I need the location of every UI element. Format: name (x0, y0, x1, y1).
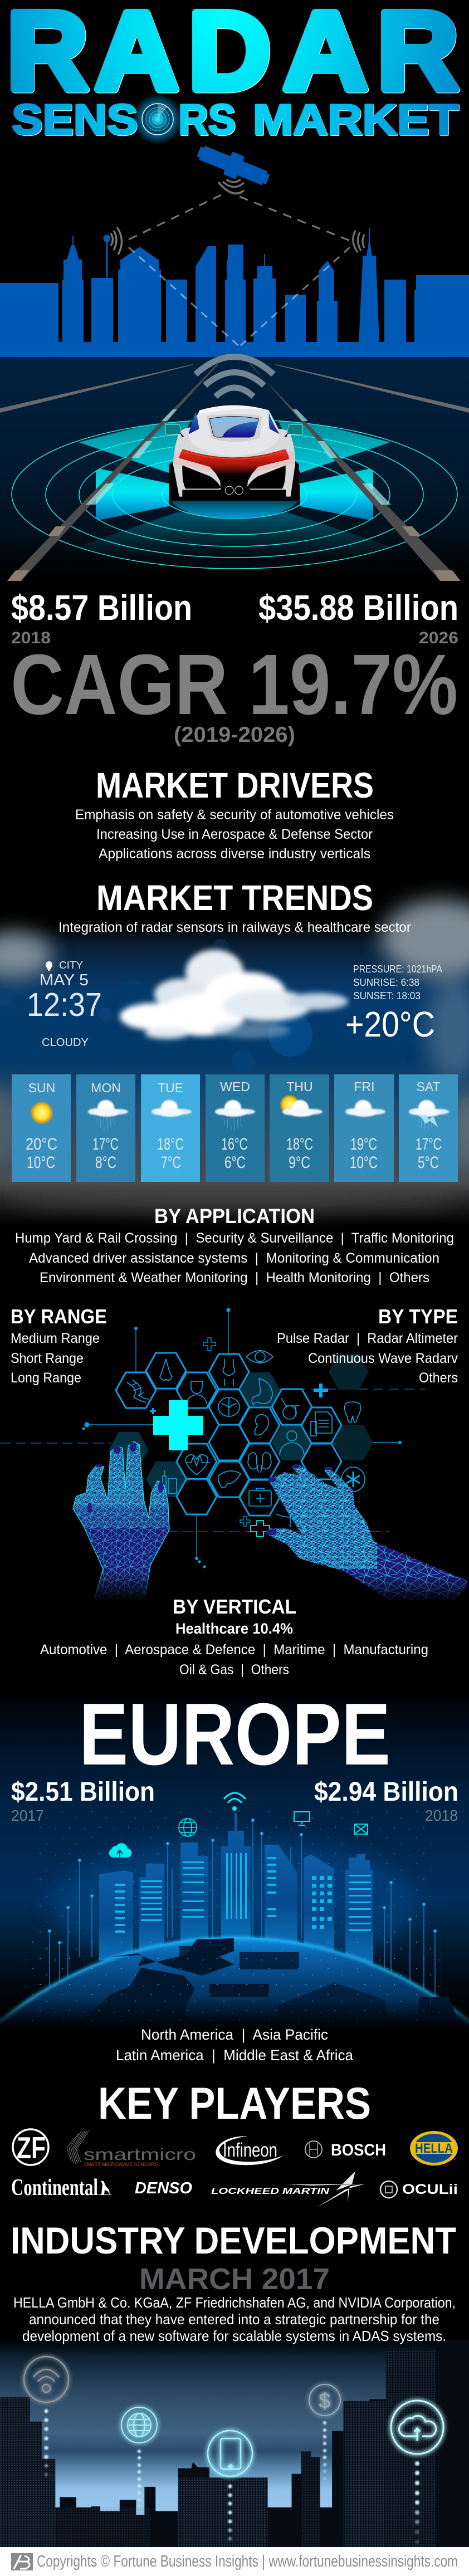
skyline (0, 2339, 469, 2547)
driver list (75, 807, 394, 862)
right wireframe hand (263, 1463, 469, 1603)
car (165, 405, 302, 501)
icon: kidneys (248, 1453, 271, 1469)
logo: Lockheed Martin: LOCKHEED MARTIN (211, 2187, 330, 2196)
medical icons (127, 1351, 365, 1527)
logo: Hella (410, 2131, 458, 2166)
dashed circuit lines (0, 1389, 425, 1532)
by range (11, 1305, 107, 1386)
lit windows (0, 2351, 435, 2547)
card: Tuesday: TUE (158, 1081, 183, 1095)
card: Wednesday (206, 1074, 265, 1182)
dim filled hexagons (109, 1354, 373, 1497)
icon: big cyan cross (153, 1400, 203, 1450)
regions list: Latin America | Middle East & Africa (116, 2047, 354, 2064)
logo: Bosch: BOSCH (331, 2141, 386, 2159)
card: Thursday: 9°C (289, 1153, 310, 1172)
icon: radar dial replacing the O (132, 94, 183, 145)
icon: vial and syringe (168, 1479, 177, 1493)
left wireframe hand (72, 1441, 171, 1600)
driver list: Emphasis on safety & security of automotive vehicles (75, 807, 394, 823)
market drivers (75, 765, 394, 862)
healthcare share: Healthcare 10.4% (175, 1620, 293, 1637)
pressure, sunrise, sunset (353, 964, 442, 1001)
heading: Europe: EUROPE (79, 1685, 390, 1783)
logo: Fortune Business Insights (11, 2553, 33, 2570)
card: Sunday: 20°C (26, 1135, 57, 1153)
drifting grey clouds (0, 900, 469, 1210)
vertical list (40, 1642, 428, 1678)
left hand fingernails (87, 1442, 164, 1513)
road scene (0, 356, 469, 581)
card: Thursday: THU (286, 1079, 313, 1094)
card: Thursday: 18°C (286, 1135, 313, 1153)
icon: doctor (287, 1431, 297, 1441)
CAGR period: (2019-2026) (174, 723, 295, 747)
right hand fade (329, 1576, 469, 1602)
card: Tuesday (141, 1074, 200, 1182)
title (7, 0, 458, 144)
icon: wifi circle (24, 2357, 69, 2402)
application list: Environment & Weather Monitoring | Health Monitoring | Others (40, 1270, 429, 1285)
continents (90, 1938, 457, 2016)
card: Friday (334, 1074, 394, 1182)
logo: Hella: HELLA (415, 2141, 453, 2156)
road outer lines (0, 364, 469, 413)
signal arcs and dashed links (111, 195, 364, 346)
location and time: MAY 5 (40, 971, 89, 989)
city towers (99, 1814, 373, 1963)
vertical list: Automotive | Aerospace & Defence | Maritime | Manufacturing (40, 1642, 428, 1658)
globe star field (22, 1938, 446, 2022)
regions list: North America | Asia Pacific (141, 2026, 328, 2043)
heading: by range: BY RANGE (11, 1305, 107, 1328)
icon: mail (354, 1824, 368, 1834)
range list: Long Range (11, 1370, 81, 1386)
application list: Hump Yard & Rail Crossing | Security & Surveillance | Traffic Monitoring (15, 1230, 454, 1246)
by vertical (40, 1595, 428, 1678)
icon: nose (160, 1359, 172, 1380)
card: Friday: 10°C (350, 1153, 378, 1172)
icon: wifi (224, 1793, 246, 1810)
icon: prescription (315, 1412, 332, 1433)
logo: smartmicro: smartmicro (84, 2145, 196, 2164)
icon: wheelchair (283, 1406, 296, 1419)
tower windows (115, 1853, 371, 1933)
data lines with dots (48, 1819, 437, 2005)
card: Sunday (12, 1074, 71, 1182)
right hand fingernails (266, 1464, 333, 1535)
icon: brain (218, 1397, 240, 1416)
left hand fade (91, 1571, 150, 1600)
outlined hexagons (116, 1353, 341, 1516)
heading: by type: BY TYPE (378, 1305, 458, 1328)
card: Saturday: 5°C (418, 1153, 439, 1172)
icon: first aid kit (249, 1490, 271, 1506)
icon: star of life (341, 1467, 365, 1492)
icon: heart (185, 1455, 208, 1475)
type list (277, 1331, 458, 1386)
stat: 2018 value: $8.57 Billion (11, 588, 192, 628)
logo: ZF: ZF (17, 2130, 46, 2165)
logo: Infineon (216, 2136, 284, 2165)
location and time: CLOUDY (42, 1037, 89, 1049)
type list: Pulse Radar | Radar Altimeter (277, 1331, 458, 1346)
card: Thursday (270, 1074, 329, 1182)
range list (11, 1331, 100, 1386)
heading: market trends: MARKET TRENDS (96, 878, 373, 918)
by application (15, 1205, 454, 1285)
connector lines with dots (82, 1308, 401, 1568)
year: 2018: 2018 (425, 1807, 458, 1824)
logo: smartmicro (67, 2131, 196, 2167)
icon: stomach (252, 1379, 272, 1405)
type list: Others (419, 1370, 458, 1386)
current temperature: +20°C (345, 1004, 435, 1044)
icon: DNA (127, 1380, 149, 1402)
stat: 2018 value: $2.94 Billion (314, 1777, 458, 1807)
type list: Continuous Wave Radarv (308, 1351, 458, 1366)
card: Monday: 8°C (95, 1153, 116, 1172)
skyline (0, 228, 469, 357)
icon: globe circle (121, 2407, 157, 2443)
icon: knee joint (223, 1359, 235, 1386)
market trends (58, 878, 411, 935)
driver list: Applications across diverse industry verticals (99, 846, 370, 862)
icon: nurse (187, 1381, 207, 1404)
stats: 2018 and 2026 market size (11, 588, 458, 647)
range list: Medium Range (11, 1331, 100, 1346)
icon: tooth (345, 1402, 360, 1423)
icon: caduceus (276, 1511, 305, 1527)
development paragraph: announced that they have entered into a strategic partnership for the (29, 2311, 439, 2328)
icon: map pin (46, 961, 52, 971)
application list (15, 1230, 454, 1285)
footer (0, 2547, 469, 2576)
driver list: Increasing Use in Aerospace & Defense Sector (96, 827, 373, 842)
forecast cards (12, 1074, 458, 1182)
hexagon medical graphic (0, 1308, 469, 1603)
icon: ear (255, 1415, 268, 1435)
globe (0, 1934, 469, 2027)
icon: eye (246, 1351, 273, 1363)
logo: Bosch (305, 2141, 386, 2159)
location and time: CITY (59, 960, 83, 971)
development paragraph (13, 2294, 456, 2344)
card: Friday: FRI (354, 1079, 375, 1094)
card: Wednesday: 6°C (224, 1153, 246, 1172)
icon: globe (179, 1819, 197, 1836)
logo: Lockheed Martin (211, 2171, 365, 2207)
pressure, sunrise, sunset: PRESSURE: 1021hPA (353, 964, 442, 975)
card: Monday (76, 1074, 135, 1182)
title line: SENSORS MARKET: MARKET (253, 96, 458, 144)
card: Wednesday: WED (220, 1079, 250, 1094)
location and time: 12:37 (27, 986, 102, 1023)
development paragraph: development of a new software for scalable systems in ADAS systems. (22, 2328, 446, 2344)
bottom city photo (0, 2339, 469, 2547)
trend text: Integration of radar sensors in railways & healthcare sector (58, 920, 411, 935)
big white cloud (120, 950, 348, 1039)
card: Tuesday: 18°C (157, 1135, 184, 1153)
card: Tuesday: 7°C (161, 1153, 181, 1172)
pressure, sunrise, sunset: SUNSET: 18:03 (353, 990, 421, 1001)
heading: by application: BY APPLICATION (154, 1205, 315, 1228)
icon: cloud circle (391, 2401, 443, 2454)
regions list (116, 2026, 354, 2064)
location and time (27, 960, 102, 1049)
card: Saturday (399, 1074, 458, 1182)
footer background (0, 2547, 469, 2576)
road inner dashed lanes (7, 364, 461, 581)
icon: satellite (194, 140, 272, 193)
card: Wednesday: 16°C (221, 1135, 248, 1153)
icon: dollar circle: $ (319, 2389, 331, 2413)
heading: market drivers: MARKET DRIVERS (96, 765, 374, 805)
title line: SENSORS MARKET: RS (178, 96, 236, 144)
road background (0, 357, 469, 575)
star field (33, 1805, 434, 2016)
centre glow behind city (51, 1838, 418, 1972)
by type (277, 1305, 458, 1386)
heading: by vertical: BY VERTICAL (173, 1595, 296, 1618)
logo: smartmicro: SMART MICROWAVE SENSORS (84, 2162, 158, 2167)
icon: cloud upload (109, 1843, 131, 1858)
card: Sunday: 10°C (27, 1153, 55, 1172)
logo: Denso: DENSO (135, 2179, 192, 2197)
Europe background (0, 1688, 469, 2039)
Europe panel (0, 1700, 469, 2063)
year: 2026: 2026 (419, 629, 458, 647)
sky (0, 2339, 469, 2547)
stat: 2017 value: $2.51 Billion (11, 1777, 155, 1807)
card: Saturday: 17°C (416, 1135, 442, 1153)
icon: wifi arcs above car (196, 356, 273, 397)
card: Saturday: SAT (416, 1079, 441, 1094)
vertical list: Oil & Gas | Others (179, 1662, 289, 1678)
year: 2018: 2018 (11, 629, 51, 647)
card: Friday: 19°C (350, 1135, 377, 1153)
year: 2017: 2017 (11, 1807, 44, 1824)
title line: SENSORS MARKET: SENS (12, 96, 138, 144)
logo: Oculii (380, 2181, 458, 2198)
car disc under vehicle (170, 476, 299, 519)
weather panel (0, 900, 469, 1225)
application list: Advanced driver assistance systems | Monitoring & Communication (29, 1250, 439, 1266)
card: Monday: MON (91, 1081, 121, 1095)
key players (11, 2079, 458, 2207)
industry development (11, 2220, 456, 2344)
range list: Short Range (11, 1351, 84, 1366)
dotted connectors (45, 2409, 419, 2544)
fade at base of globe (0, 2000, 469, 2034)
title line: SENSORS MARKET (12, 96, 458, 144)
icon: monitor (294, 1812, 310, 1825)
card: Monday: 17°C (92, 1135, 119, 1153)
small crosses (150, 1338, 328, 1537)
icon: liver (218, 1471, 241, 1488)
heading: key players: KEY PLAYERS (98, 2079, 371, 2129)
date: MARCH 2017 (139, 2262, 330, 2296)
radar rings and sectors (12, 415, 457, 579)
logo: Infineon: Infineon (223, 2139, 277, 2161)
logo: Continental: Continental (11, 2175, 98, 2201)
pressure, sunrise, sunset: SUNRISE: 6:38 (353, 977, 419, 988)
title line: RADAR (7, 0, 458, 113)
logo: Oculii: OCULii (402, 2182, 458, 2197)
card: Sunday: SUN (28, 1081, 55, 1095)
icon: dollar circle (309, 2384, 340, 2416)
weather background sky (0, 925, 469, 1225)
bokeh circles (0, 939, 312, 1072)
icon: phone circle (208, 2431, 252, 2476)
